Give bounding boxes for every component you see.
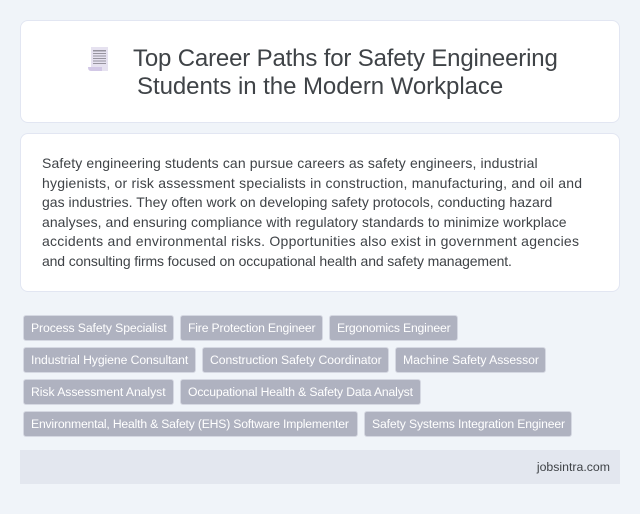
panel: title card [20, 20, 620, 123]
icon: document scroll [88, 47, 108, 71]
tags: career paths: Risk Assessment Analyst [31, 385, 166, 399]
footer source text: jobsintra.com [537, 460, 610, 474]
description text: hygienists, or risk assessment specialists in construction, manufacturing, and oil and [42, 175, 582, 191]
title line 2: Students in the Modern Workplace [137, 73, 503, 100]
tags: career paths: Construction Safety Coordinator [210, 353, 382, 367]
description text: and consulting firms focused on occupational health and safety management. [42, 253, 512, 269]
panel: description [20, 133, 620, 292]
tags: career paths: Safety Systems Integration Engineer [372, 417, 565, 431]
tags: career paths: Fire Protection Engineer [188, 321, 315, 335]
tags: career paths: Environmental, Health & Safety (EHS) Software Implementer [31, 417, 349, 431]
tags: career paths: Ergonomics Engineer [337, 321, 450, 335]
tags: career paths: Machine Safety Assessor [403, 353, 539, 367]
description text: gas industries. They often work on developing safety protocols, conducting hazard [42, 194, 552, 210]
tags: career paths [23, 315, 572, 437]
description text [42, 155, 582, 269]
tags: career paths: Industrial Hygiene Consultant [31, 353, 188, 367]
tags: career paths: Process Safety Specialist [31, 321, 167, 335]
description text: accidents and environmental risks. Opportunities also exist in government agencies [42, 233, 579, 249]
footer bar [20, 450, 620, 484]
tags: career paths: Occupational Health & Safety Data Analyst [188, 385, 413, 399]
description text: Safety engineering students can pursue careers as safety engineers, industrial [42, 155, 538, 171]
title line 1: Top Career Paths for Safety Engineering [133, 45, 558, 72]
description text: analyses, and ensuring compliance with regulatory standards to minimize workplace [42, 214, 567, 230]
